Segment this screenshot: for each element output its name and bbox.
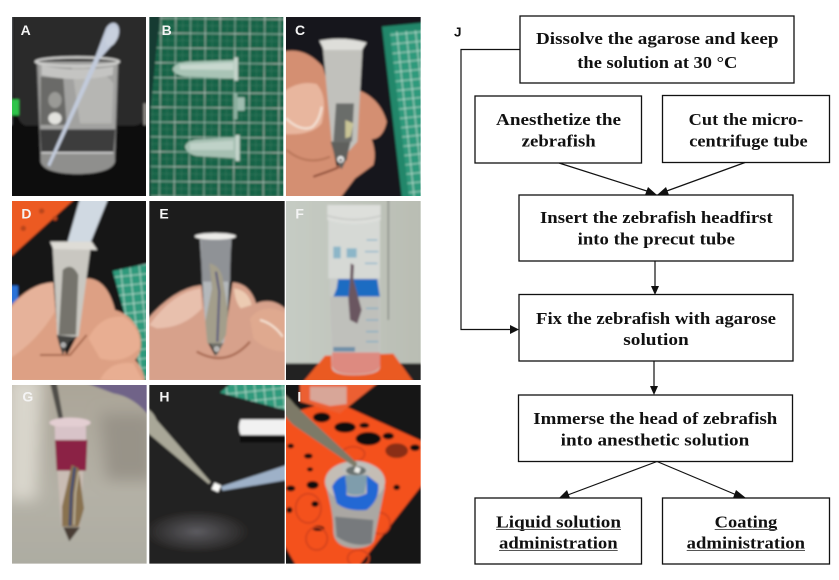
letter E: E: [159, 206, 169, 222]
letter I: I: [297, 389, 301, 405]
blue foam: [333, 279, 380, 297]
hand: [10, 278, 145, 382]
white cylinder: [239, 419, 287, 442]
box: liquid solution administration: administration: [499, 533, 618, 552]
letter D: D: [21, 206, 31, 222]
box: cut tube: Cut the micro-: [689, 110, 804, 129]
box: coating administration: Coating: [715, 512, 778, 531]
arrow: immerse to liquid: [559, 462, 657, 498]
tube with fish: [50, 242, 97, 355]
box: fix zebrafish: solution: [623, 330, 689, 349]
box: immerse head: Immerse the head of zebrafish: [533, 409, 778, 428]
bypass arrow from dissolve step to fix step: [461, 50, 520, 334]
white square: [211, 482, 221, 492]
glove: [88, 385, 147, 414]
photo panel I: vial in orange rack: [283, 383, 423, 567]
pipette: [67, 198, 108, 246]
photo panel D: pipette filling tube: [10, 198, 148, 382]
zebrafish body: [62, 465, 84, 541]
upper intact tube: [173, 57, 238, 81]
letter H: H: [159, 389, 169, 405]
tube with fish: [319, 39, 367, 169]
arrow: immerse to coating: [657, 462, 746, 498]
box: anesthetize: zebrafish: [522, 132, 596, 150]
arrow: cut to insert: [657, 162, 745, 195]
photo panel B: cut tubes on cutting mat: [147, 15, 285, 198]
flowchart label J: J: [454, 26, 462, 40]
green mat: [113, 263, 148, 382]
tube: [195, 233, 236, 343]
conical vial: [325, 461, 385, 548]
photo panel E: fish inside tube, fingers: [147, 198, 287, 382]
arrow: insert to fix: [651, 261, 659, 295]
box: insert zebrafish: into the precut tube: [578, 229, 736, 248]
green mat corner: [220, 383, 287, 410]
fish: [205, 263, 228, 356]
box: liquid solution administration: [475, 498, 642, 564]
box: immerse head: into anesthetic solution: [561, 431, 750, 450]
forceps: [50, 383, 63, 419]
box: anesthetize: [475, 96, 642, 163]
box: liquid solution administration: Liquid solution: [496, 512, 622, 531]
forceps: [283, 393, 357, 467]
box: dissolve agarose: Dissolve the agarose and keep: [536, 29, 778, 48]
fish: [348, 263, 362, 324]
letter B: B: [162, 22, 172, 38]
arrow: fix to immerse: [650, 361, 658, 395]
photo panel G: red solution tube held by forceps: [12, 385, 147, 564]
letter G: G: [22, 389, 33, 405]
pipette: [47, 23, 120, 167]
blue foam: [332, 475, 379, 510]
tube cap piece: [233, 93, 245, 119]
box: insert zebrafish: [519, 195, 793, 261]
white square: [354, 467, 361, 473]
hand: [147, 282, 287, 382]
letter C: C: [295, 22, 305, 38]
box: fix zebrafish: [519, 294, 793, 361]
tube: [49, 418, 91, 527]
box: coating administration: administration: [687, 533, 806, 552]
box: immerse head: [518, 395, 792, 462]
letter A: A: [21, 22, 31, 38]
photo panel A: beaker with pipette: [10, 15, 148, 198]
orange rack: [10, 198, 75, 256]
conical vial: [327, 205, 381, 375]
box: dissolve agarose: the solution at 30 °C: [577, 53, 737, 72]
pipette tip: [221, 465, 287, 491]
box: fix zebrafish: Fix the zebrafish with agarose: [536, 309, 776, 328]
orange stand: [303, 354, 413, 382]
beaker: [36, 57, 119, 174]
inner tube: [341, 461, 371, 495]
box: dissolve agarose: [520, 16, 794, 83]
lower cut tube: [185, 135, 240, 161]
box: anesthetize: Anesthetize the: [496, 110, 621, 129]
photo panel H: micropipette tip and coating square: [143, 383, 287, 566]
hand: [283, 51, 387, 198]
box: insert zebrafish: Insert the zebrafish headfirst: [540, 208, 773, 227]
letter F: F: [295, 206, 304, 222]
box: coating administration: [662, 498, 830, 564]
orange rack: [283, 383, 423, 567]
photo panel F: tube suspended in conical vial: [283, 198, 423, 383]
photo panel C: fish in tube held by fingers: [283, 15, 423, 198]
grey fine tip: [147, 408, 211, 484]
arrow: anesthetize to insert: [559, 163, 657, 195]
cutting mat: [382, 23, 423, 198]
box: cut tube: [662, 96, 830, 162]
box: cut tube: centrifuge tube: [689, 132, 808, 150]
